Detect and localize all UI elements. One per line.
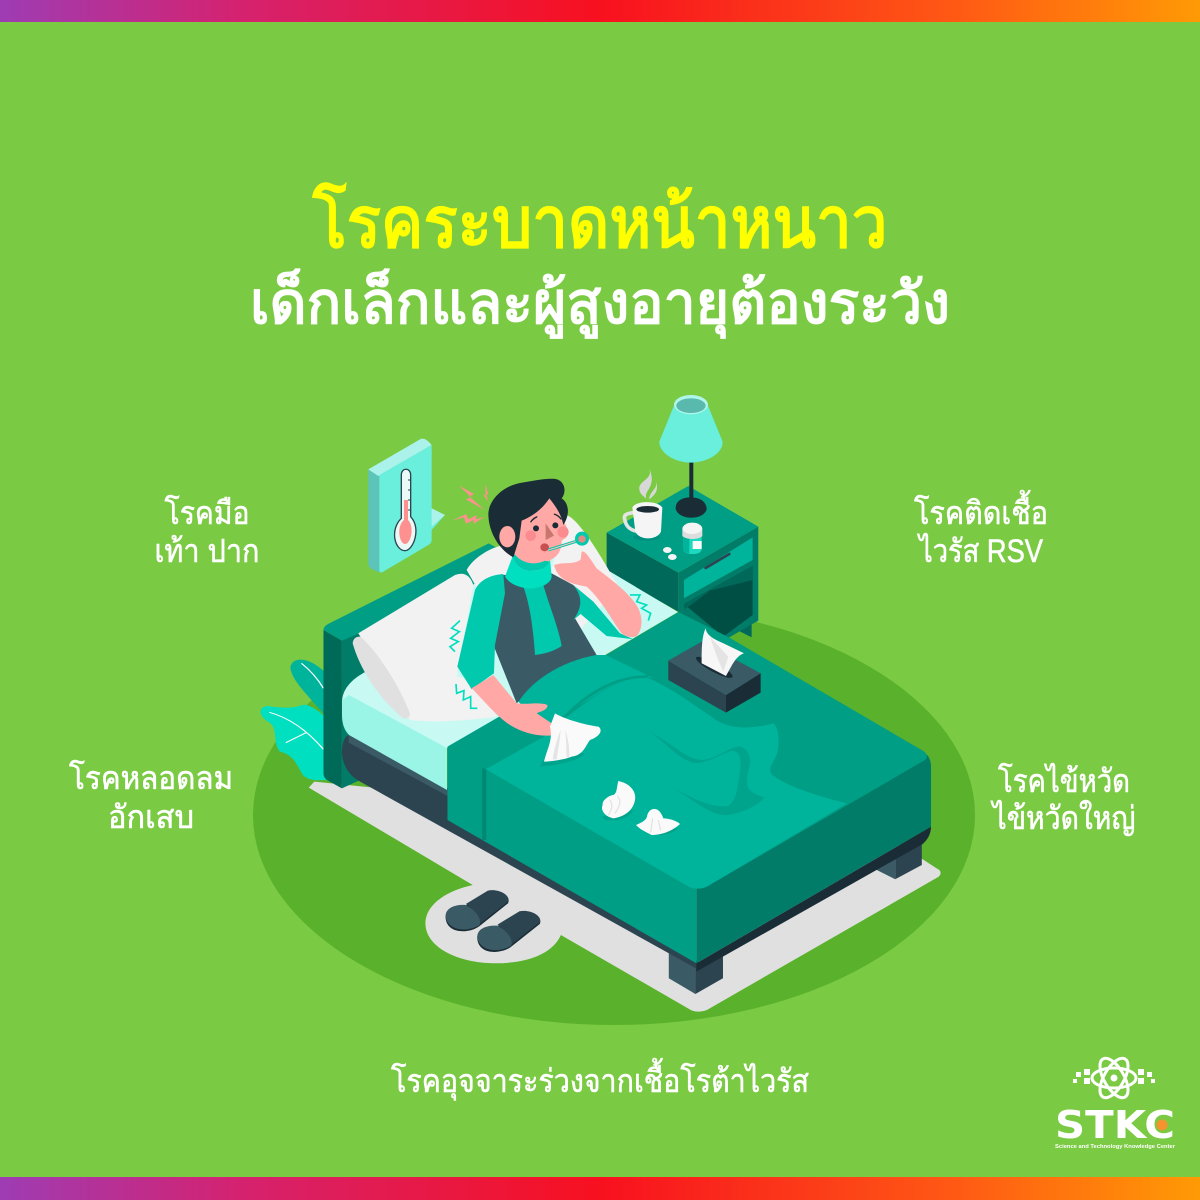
- eyes and brows: [530, 513, 562, 531]
- thermometer speech panel: [368, 439, 445, 573]
- title: โรคระบาดหน้าหนาว: [312, 180, 888, 263]
- face: [513, 490, 568, 561]
- subtitle: เด็กเล็กและผู้สูงอายุต้องระวัง: [250, 268, 950, 340]
- crease lines: [484, 658, 677, 768]
- tissue in hand: [544, 713, 601, 762]
- slipper one: [446, 890, 509, 931]
- top gradient bar: [0, 0, 1200, 22]
- mattress: [342, 530, 678, 790]
- label: bronchitis: โรคหลอดลม: [69, 760, 233, 796]
- pillows: [353, 515, 618, 721]
- scarf: [505, 554, 562, 655]
- fever zigzags: [450, 595, 651, 708]
- STKC logo: [1055, 1054, 1176, 1150]
- lap upper: [519, 655, 654, 735]
- ground ellipse: [253, 605, 975, 1025]
- blanket side left: [447, 747, 696, 963]
- person lower arm: [472, 675, 557, 736]
- floor and slipper mat: [309, 782, 941, 1012]
- logo orange dot: [1156, 1120, 1168, 1130]
- label: RSV infection: [914, 490, 1048, 569]
- label: cold and flu: โรคไข้หวัด: [998, 763, 1130, 799]
- label: cold and flu: [990, 763, 1136, 836]
- blanket side right: [696, 755, 931, 963]
- label: hand foot mouth disease: โรคมือ: [164, 495, 250, 531]
- blanket lap: [484, 677, 847, 889]
- label: rotavirus diarrhea: โรคอุจจาระร่วงจากเชื้อโรต้าไวรัส: [391, 1058, 809, 1101]
- used tissues: [540, 713, 680, 835]
- logo dots: [1073, 1069, 1155, 1084]
- raised arm and hand: [554, 551, 641, 637]
- plant leaves: [261, 660, 328, 780]
- bottom gradient bar: [0, 1177, 1200, 1200]
- illustration: sick person in bed: [253, 395, 975, 1025]
- lamp: [659, 395, 723, 518]
- logo tagline: Science and Technology Knowledge Center: [1055, 1144, 1176, 1150]
- mouth: [540, 543, 549, 551]
- logo atom mark: [1092, 1054, 1136, 1102]
- blanket back section: [447, 612, 927, 889]
- blanket fold line: [480, 768, 489, 840]
- tissue shadows: [540, 753, 678, 835]
- nightstand: [607, 486, 758, 667]
- slipper two: [477, 911, 540, 952]
- label: bronchitis: [69, 760, 233, 835]
- label: RSV infection: โรคติดเชื้อ: [914, 490, 1048, 531]
- bed legs: [669, 840, 922, 994]
- coffee cup with steam: [624, 468, 662, 541]
- medicine bottle and pills: [663, 523, 702, 560]
- slippers: [446, 890, 540, 952]
- label: hand foot mouth disease: [154, 495, 260, 569]
- crumpled tissue one: [602, 781, 635, 818]
- crumpled tissue two folds: [651, 818, 661, 833]
- label: RSV infection: ไวรัส RSV: [916, 533, 1044, 569]
- person head, scarf and raised arm: [488, 479, 641, 655]
- hair: [488, 479, 568, 557]
- blanket: [447, 612, 931, 963]
- crumpled tissue two: [636, 809, 680, 835]
- thermometer in mouth: [548, 532, 589, 550]
- tissue box: [668, 628, 761, 713]
- logo wordmark: STKC: [1055, 1103, 1175, 1147]
- blanket folds: [650, 732, 764, 815]
- neck: [513, 543, 552, 565]
- headboard: [323, 543, 535, 788]
- nose: [546, 523, 554, 540]
- cheeks: [525, 526, 569, 541]
- ear: [499, 526, 515, 547]
- bed base: [342, 734, 931, 972]
- pain sparks: [452, 484, 488, 524]
- label: hand foot mouth disease: เท้า ปาก: [154, 533, 260, 569]
- crumpled tissue one folds: [608, 796, 620, 815]
- person torso and sleeves: [457, 573, 633, 703]
- label: cold and flu: ไข้หวัดใหญ่: [990, 800, 1136, 836]
- label: bronchitis: อักเสบ: [108, 799, 194, 835]
